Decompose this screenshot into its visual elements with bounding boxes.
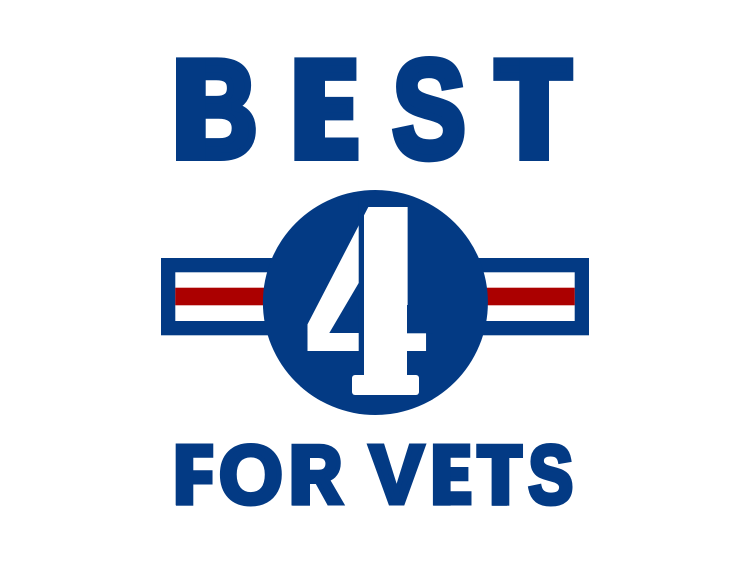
number 4: 4 (310, 160, 422, 442)
subtitle: FOR VETS: R (289, 429, 343, 521)
title: BEST: S (392, 32, 466, 187)
subtitle: FOR VETS (173, 428, 573, 521)
subtitle: FOR VETS: V (370, 429, 424, 521)
title: BEST (172, 31, 571, 187)
subtitle: FOR VETS: F (173, 428, 214, 521)
stripe bar (161, 258, 589, 335)
roundel circle (263, 190, 488, 415)
subtitle: FOR VETS: T (478, 430, 522, 521)
title: BEST: E (290, 31, 360, 186)
title: BEST: B (172, 33, 258, 187)
title: BEST: T (496, 31, 571, 187)
emblem: roundel with stripes and number 4 (161, 190, 589, 415)
number 4 (300, 207, 433, 401)
subtitle: FOR VETS: S (528, 428, 573, 521)
subtitle: FOR VETS: E (431, 429, 472, 521)
subtitle: FOR VETS: O (219, 429, 283, 521)
